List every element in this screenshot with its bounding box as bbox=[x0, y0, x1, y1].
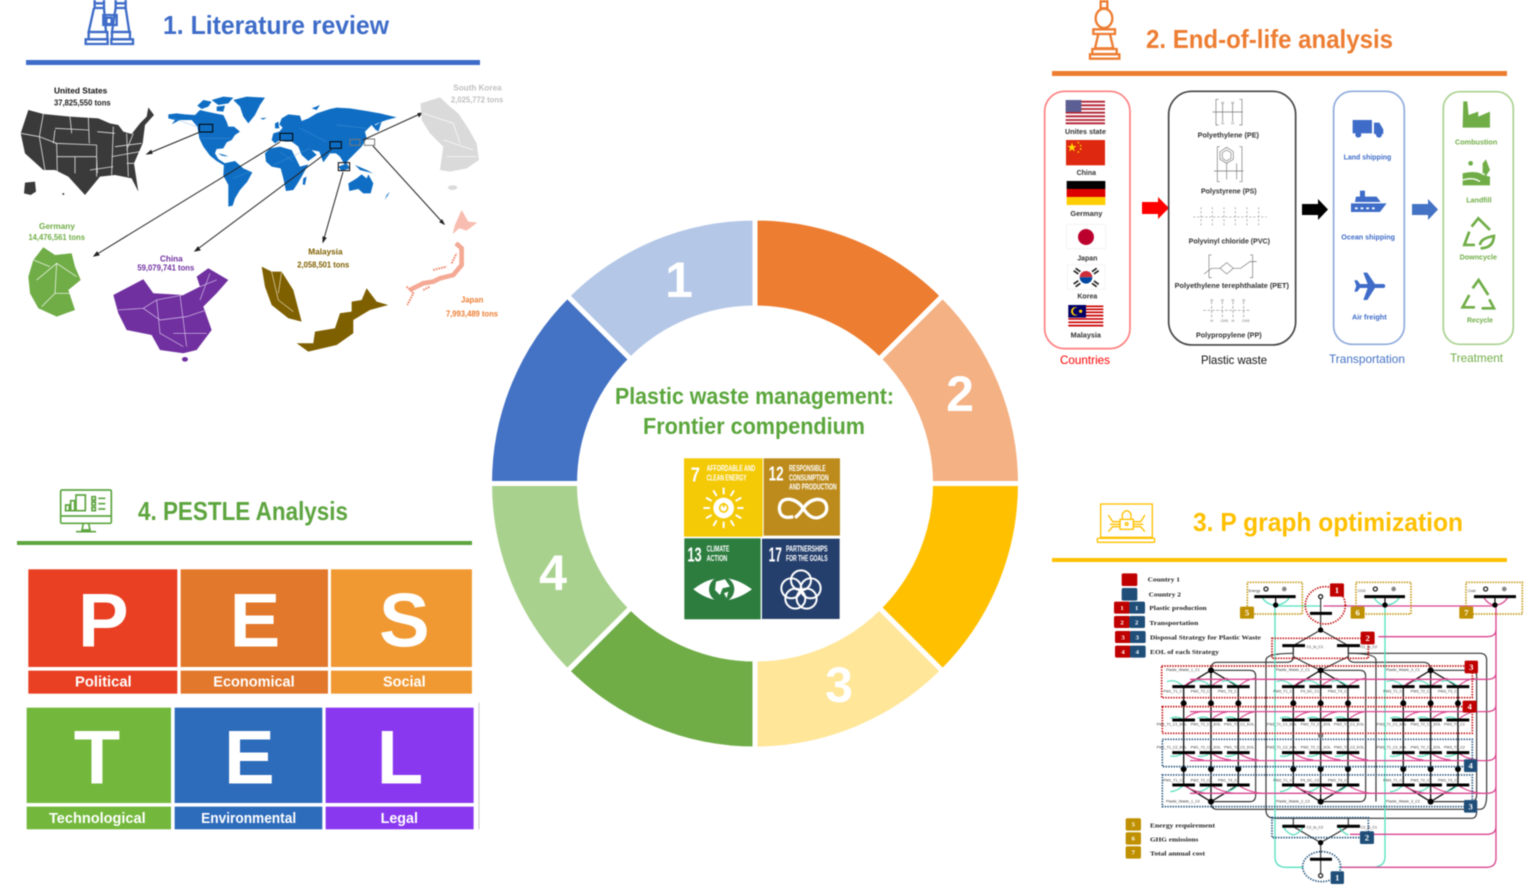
tiny process labels: Plastic_Waste_2_C1 bbox=[1276, 668, 1310, 672]
segment: gold bbox=[879, 484, 1020, 671]
chemical: PET bbox=[1204, 255, 1257, 278]
text: China bbox=[137, 254, 195, 273]
text: combustion: Combustion bbox=[1455, 137, 1498, 146]
diagram: process graph bbox=[1114, 573, 1522, 884]
chemical: polyethylene: H bbox=[1221, 121, 1224, 125]
tiny process labels: PW3_T1_C2_EOL bbox=[1377, 746, 1407, 750]
heading: end-of-life analysis: 2. End-of-life analysis bbox=[1146, 24, 1393, 54]
icon: laptop lock bbox=[1097, 504, 1155, 542]
flag: Japan bbox=[1067, 224, 1106, 249]
tile: Technological: Technological bbox=[49, 810, 146, 827]
text: PET: Polyethylene terephthalate (PET) bbox=[1175, 281, 1290, 290]
tiny process labels: Plastic_Waste_3_C1 bbox=[1386, 668, 1420, 672]
panel: PESTLE analysis bbox=[17, 490, 479, 829]
legend: 5 bbox=[1132, 822, 1136, 829]
text: Japan: 7,993,489 tons bbox=[446, 310, 498, 319]
text: landfill: Landfill bbox=[1466, 196, 1492, 205]
panel: plastic waste bbox=[1169, 91, 1296, 345]
chemical: polyethylene: H bbox=[1221, 101, 1224, 105]
text: polyethylene: Polyethylene (PE) bbox=[1198, 130, 1260, 139]
text: South Korea: 2,025,772 tons bbox=[451, 96, 504, 105]
tile: Environmental: E bbox=[224, 715, 275, 800]
process columns bbox=[1167, 667, 1481, 805]
badges: red bbox=[1330, 583, 1478, 713]
panel: SDG tiles bbox=[684, 458, 840, 619]
tile: SDG 17: PARTNERSHIPS bbox=[786, 544, 828, 554]
tile: SDG 7: 7 bbox=[691, 465, 700, 487]
legend: Total annual cost bbox=[1150, 851, 1206, 858]
text: South Korea: South Korea bbox=[453, 84, 502, 93]
text: United States: 37,825,550 tons bbox=[54, 99, 111, 108]
tiny process labels: Plastic_Waste_1_C2 bbox=[1166, 799, 1200, 803]
text: Japan bbox=[446, 295, 498, 319]
tile: SDG 13: CLIMATE bbox=[707, 544, 729, 554]
tile: SDG 12: CONSUMPTION bbox=[789, 472, 829, 482]
tiny process labels: PW3_T1_C2 bbox=[1383, 778, 1404, 782]
chemical: polypropylene: H bbox=[1242, 299, 1245, 303]
tiny process labels: PW2_T3_C1_EOL bbox=[1334, 722, 1364, 726]
icon: monitor chart bbox=[61, 490, 111, 532]
connectors: gray process lines bbox=[1211, 597, 1495, 875]
flag: China bbox=[1066, 140, 1105, 165]
tile: Political: Political bbox=[75, 674, 132, 691]
title: centre: Plastic waste management: bbox=[615, 383, 894, 409]
legend: 1 bbox=[1135, 605, 1138, 612]
text: Japan: Japan bbox=[1077, 254, 1098, 263]
caption: Countries: Countries bbox=[1060, 353, 1110, 367]
tiny process labels: Energy bbox=[1249, 589, 1260, 593]
tiny process labels: PW3_T2_C bbox=[1411, 690, 1430, 694]
ring numbers: 2 bbox=[946, 366, 974, 422]
PESTLE grid bbox=[27, 569, 479, 829]
panel: end-of-life analysis bbox=[1045, 1, 1513, 367]
ring numbers bbox=[539, 252, 974, 713]
tile: Environmental bbox=[175, 708, 322, 829]
badges: navy bbox=[1331, 759, 1477, 884]
tile: Economical: Economical bbox=[213, 674, 295, 691]
tile: Economical bbox=[181, 569, 328, 694]
caption: Treatment: Treatment bbox=[1450, 351, 1504, 365]
chemical: polypropylene: H bbox=[1232, 299, 1235, 303]
legend: Transportation bbox=[1149, 620, 1199, 627]
tiny process labels: PW2_T1_C2 bbox=[1273, 778, 1294, 782]
tiny process labels: PW1_T1_C bbox=[1163, 690, 1183, 694]
icon: downcycle bbox=[1464, 218, 1494, 248]
icon: landfill bbox=[1463, 159, 1490, 185]
text: South Korea bbox=[451, 84, 504, 105]
panel: transportation bbox=[1334, 91, 1404, 344]
text: Malaysia: Malaysia bbox=[1071, 331, 1102, 340]
legend: 4 bbox=[1121, 649, 1125, 656]
panel: treatment bbox=[1443, 92, 1513, 344]
tiny process labels: PW1_T1_C1_EOL bbox=[1157, 722, 1187, 726]
badge numbers: 4 bbox=[1468, 761, 1473, 771]
icon: ship bbox=[1351, 191, 1387, 212]
caption: Transportation: Transportation bbox=[1329, 352, 1405, 366]
badge numbers: 6 bbox=[1355, 608, 1360, 618]
map: Malaysia bbox=[262, 248, 388, 352]
tile: SDG 17 bbox=[762, 539, 840, 619]
text: land shipping: Land shipping bbox=[1344, 153, 1391, 162]
text: air freight: Air freight bbox=[1352, 313, 1387, 322]
heading: literature review: 1. Literature review bbox=[163, 10, 390, 40]
legend: Plastic production bbox=[1149, 605, 1207, 612]
tiny process labels: C2_to_C1 bbox=[1361, 826, 1377, 830]
legend: 7 bbox=[1132, 850, 1136, 857]
tiny process labels: PW2_T2_C1_EOL bbox=[1301, 722, 1331, 726]
badge numbers: 4 bbox=[1467, 702, 1472, 712]
text: downcycle: Downcycle bbox=[1460, 252, 1497, 261]
tiny process labels: Plastic_Waste_2_C2 bbox=[1276, 799, 1310, 803]
connectors: pink streams bbox=[1190, 597, 1508, 867]
tiny process labels: PW2_T3_C2_EOL bbox=[1334, 746, 1364, 750]
tiny process labels: PW1_T3_C2_EOL bbox=[1224, 746, 1254, 750]
tiny process labels: P4_DC_C2 bbox=[1301, 778, 1319, 782]
text: United States bbox=[54, 86, 111, 108]
title: centre: Frontier compendium bbox=[643, 413, 865, 439]
chemical: polypropylene: H bbox=[1210, 319, 1213, 323]
icon: plane bbox=[1354, 273, 1385, 300]
icon: truck bbox=[1353, 120, 1383, 138]
legend: Country 2 bbox=[1149, 591, 1182, 598]
badges: gold bbox=[1240, 607, 1473, 619]
tiny process labels: PW2_T1_C1_EOL bbox=[1267, 722, 1297, 726]
arrow: blue bbox=[1412, 199, 1438, 220]
legend: 2 bbox=[1120, 619, 1124, 626]
badge numbers: 3 bbox=[1469, 662, 1474, 672]
tiny process labels: CO2 bbox=[1358, 589, 1366, 593]
tiny process labels: PW3_T2_C2 bbox=[1411, 778, 1432, 782]
tile: Social bbox=[331, 569, 472, 694]
badge numbers bbox=[1245, 585, 1474, 883]
tiny process labels: PW2_T1_C2_EOL bbox=[1267, 746, 1297, 750]
tile: SDG 7: AFFORDABLE AND bbox=[707, 463, 755, 473]
chemical: polypropylene: H bbox=[1210, 299, 1213, 303]
text: polyvinyl chloride: Polyvinyl chloride (PVC) bbox=[1189, 236, 1271, 245]
tiny process labels: PW2_T2_C2 bbox=[1191, 778, 1212, 782]
map: United States bbox=[21, 86, 154, 195]
flag: United States bbox=[1066, 100, 1105, 124]
tile: Social: Social bbox=[383, 674, 426, 691]
tile: SDG 13: 13 bbox=[687, 545, 702, 567]
tile: SDG 17: FOR THE GOALS bbox=[786, 553, 828, 563]
tile: Economical: E bbox=[230, 579, 280, 664]
heading: P graph optimization: 3. P graph optimization bbox=[1193, 507, 1463, 537]
badge numbers: 7 bbox=[1464, 608, 1469, 618]
legend: 4 bbox=[1136, 649, 1140, 656]
text: Germany: 14,476,561 tons bbox=[28, 233, 86, 242]
text: United States: United States bbox=[54, 86, 108, 95]
text: Japan: Japan bbox=[461, 295, 483, 304]
tiny process labels: PW2_T3_C2 bbox=[1328, 778, 1349, 782]
chemical: polyethylene: H bbox=[1231, 121, 1234, 125]
tile: SDG 12: 12 bbox=[769, 464, 784, 486]
tiny process labels bbox=[1157, 589, 1475, 830]
panel: literature review bbox=[21, 0, 504, 362]
tile: Environmental: Environmental bbox=[201, 810, 296, 827]
text: Korea: Korea bbox=[1077, 291, 1098, 300]
tiny process labels: PW3_T2_C2_EOL bbox=[1411, 746, 1441, 750]
flag: Germany bbox=[1067, 181, 1105, 205]
text: recycle: Recycle bbox=[1467, 315, 1493, 324]
tile: Political: P bbox=[78, 579, 129, 664]
segment: light green bbox=[490, 484, 631, 671]
map: Germany bbox=[28, 222, 86, 317]
tile: Political bbox=[28, 569, 177, 694]
tiny process labels: PW3_T1_C bbox=[1383, 690, 1403, 694]
segment: light yellow bbox=[755, 608, 943, 749]
legend: 1 bbox=[1120, 605, 1124, 612]
map: South Korea bbox=[421, 84, 504, 190]
chemical: polypropylene: CH3 bbox=[1221, 319, 1228, 323]
chemical: polyvinyl chloride bbox=[1193, 207, 1267, 227]
tiny process labels: PW2_T1_C bbox=[1273, 690, 1293, 694]
legend bbox=[1114, 573, 1261, 859]
text: ocean shipping: Ocean shipping bbox=[1341, 233, 1395, 242]
tiny process labels: PW3_T3_C2 bbox=[1444, 746, 1465, 750]
badge numbers: 3 bbox=[1468, 801, 1473, 811]
tiny process labels: Plastic_Waste_1_C1 bbox=[1166, 668, 1200, 672]
badge numbers: 2 bbox=[1365, 833, 1369, 843]
chemical: polypropylene bbox=[1203, 299, 1250, 323]
tile: Legal: Legal bbox=[381, 810, 418, 827]
tile: SDG 13 bbox=[684, 538, 761, 619]
chart: central ring bbox=[490, 218, 1020, 749]
tile: Legal: L bbox=[377, 715, 423, 800]
tiny process labels: PW1_T1_C2 bbox=[1163, 778, 1184, 782]
chemical: polyethylene: H bbox=[1231, 101, 1234, 105]
icon: binoculars bbox=[86, 0, 133, 44]
tiny process labels: PW3_T1_C1_EOL bbox=[1377, 722, 1407, 726]
flag: Korea bbox=[1067, 265, 1105, 289]
segment: orange bbox=[755, 218, 943, 359]
tile: SDG 12: RESPONSIBLE bbox=[789, 463, 826, 473]
icon: chess bishop bbox=[1090, 1, 1119, 59]
text: Germany bbox=[28, 222, 86, 242]
arrow: red bbox=[1142, 197, 1169, 219]
tile: Technological bbox=[27, 708, 171, 829]
badge numbers: 5 bbox=[1245, 608, 1250, 618]
tile: Technological: T bbox=[74, 715, 120, 800]
segment: light orange bbox=[879, 296, 1020, 484]
ring numbers: 3 bbox=[825, 657, 853, 713]
arrow: black bbox=[1302, 199, 1328, 220]
tiny process labels: PW2_T2_C2_EOL bbox=[1301, 746, 1331, 750]
badge numbers: 2 bbox=[1365, 633, 1370, 643]
legend: 3 bbox=[1136, 634, 1140, 641]
dotted groups bbox=[1162, 582, 1522, 882]
text: Unites state: Unites state bbox=[1065, 127, 1106, 136]
text: Germany: Germany bbox=[1070, 209, 1103, 218]
tiny process labels: PW3_T2_C1_EOL bbox=[1411, 722, 1441, 726]
tiny process labels: PW3_T3_C1 bbox=[1444, 722, 1465, 726]
text: Germany: Germany bbox=[39, 222, 76, 231]
heading: PESTLE analysis: 4. PESTLE Analysis bbox=[138, 496, 348, 526]
panel: P graph optimization bbox=[1052, 504, 1522, 884]
text: polystyrene: Polystyrene (PS) bbox=[1201, 186, 1257, 195]
legend: Country 1 bbox=[1148, 577, 1180, 584]
chemical: polypropylene: H bbox=[1221, 299, 1224, 303]
tiny process labels: PW2_T2_C bbox=[1191, 690, 1210, 694]
top and bottom bars bbox=[1254, 597, 1516, 859]
tile: SDG 12: AND PRODUCTION bbox=[789, 481, 837, 491]
text: China: 59,079,741 tons bbox=[137, 264, 195, 273]
tile: SDG 13: ACTION bbox=[707, 553, 727, 563]
map: Japan bbox=[407, 210, 498, 319]
chemical: polypropylene: CH3 bbox=[1242, 319, 1249, 323]
tiny process labels: PW1_T1_C2_EOL bbox=[1157, 746, 1187, 750]
tile: Social: S bbox=[379, 579, 430, 664]
tiny process labels: C1_to_C2 bbox=[1361, 645, 1377, 649]
legend: Disposal Strategy for Plastic Waste bbox=[1150, 635, 1261, 642]
map: China bbox=[113, 254, 228, 362]
tiny process labels: P4_DC_C1 bbox=[1301, 690, 1319, 694]
legend: GHG emissions bbox=[1150, 836, 1199, 843]
legend: Energy requirement bbox=[1150, 822, 1216, 829]
flag: Malaysia bbox=[1068, 305, 1103, 327]
chemical: polystyrene bbox=[1214, 147, 1243, 182]
tile: SDG 12 bbox=[764, 458, 840, 536]
text: polypropylene: Polypropylene (PP) bbox=[1196, 330, 1262, 339]
segment: green bbox=[567, 608, 755, 749]
segment: blue bbox=[490, 296, 631, 484]
map: world bbox=[168, 97, 397, 207]
text: Malaysia: Malaysia bbox=[308, 248, 343, 257]
legend: 3 bbox=[1121, 634, 1125, 641]
tiny process labels: PW1_T3_C2 bbox=[1218, 778, 1239, 782]
tiny process labels: PW1_T2_C1_EOL bbox=[1191, 722, 1221, 726]
arrows: world map to countries bbox=[94, 113, 444, 256]
tiny process labels: C2_to_C2 bbox=[1307, 826, 1323, 830]
legend: 6 bbox=[1132, 836, 1136, 843]
tiny process labels: C1_to_C1 bbox=[1307, 645, 1323, 649]
tiny process labels: PW3_T3_C2 bbox=[1438, 778, 1459, 782]
tile: SDG 7: CLEAN ENERGY bbox=[707, 472, 747, 482]
panel: countries bbox=[1045, 91, 1130, 349]
chemical: polypropylene: H bbox=[1232, 319, 1235, 323]
text: China: China bbox=[1077, 168, 1097, 177]
text: Malaysia bbox=[297, 248, 350, 269]
badge numbers: 1 bbox=[1335, 873, 1339, 883]
tiny process labels: PW1_T3_C bbox=[1218, 690, 1237, 694]
tiny process labels: PW2_T3_C bbox=[1328, 690, 1347, 694]
connectors: teal streams bbox=[1262, 597, 1400, 867]
tile: Legal bbox=[326, 708, 474, 829]
badge numbers: 1 bbox=[1335, 585, 1339, 595]
chemical: polyethylene bbox=[1213, 99, 1243, 125]
text: China: China bbox=[160, 254, 183, 263]
tiny process labels: PW1_T3_C1_EOL bbox=[1224, 722, 1254, 726]
tile: SDG 7 bbox=[684, 458, 763, 537]
tiny process labels: PW1_T2_C2_EOL bbox=[1191, 746, 1221, 750]
tiny process labels: Plastic_Waste_3_C2 bbox=[1386, 799, 1420, 803]
tile: SDG 17: 17 bbox=[769, 545, 782, 567]
tiny process labels: Cost bbox=[1468, 589, 1475, 593]
legend: 2 bbox=[1135, 619, 1139, 626]
tiny process labels: PW3_T3_C bbox=[1438, 690, 1457, 694]
segment: light blue bbox=[567, 218, 755, 359]
icon: recycle bbox=[1463, 280, 1494, 308]
text: Malaysia: 2,058,501 tons bbox=[297, 260, 350, 269]
icon: factory bbox=[1463, 101, 1490, 128]
title: centre bbox=[615, 383, 894, 439]
ring numbers: 1 bbox=[665, 252, 693, 308]
legend: EOL of each Strategy bbox=[1150, 649, 1220, 656]
ring numbers: 4 bbox=[539, 545, 567, 601]
caption: Plastic waste: Plastic waste bbox=[1201, 353, 1267, 367]
